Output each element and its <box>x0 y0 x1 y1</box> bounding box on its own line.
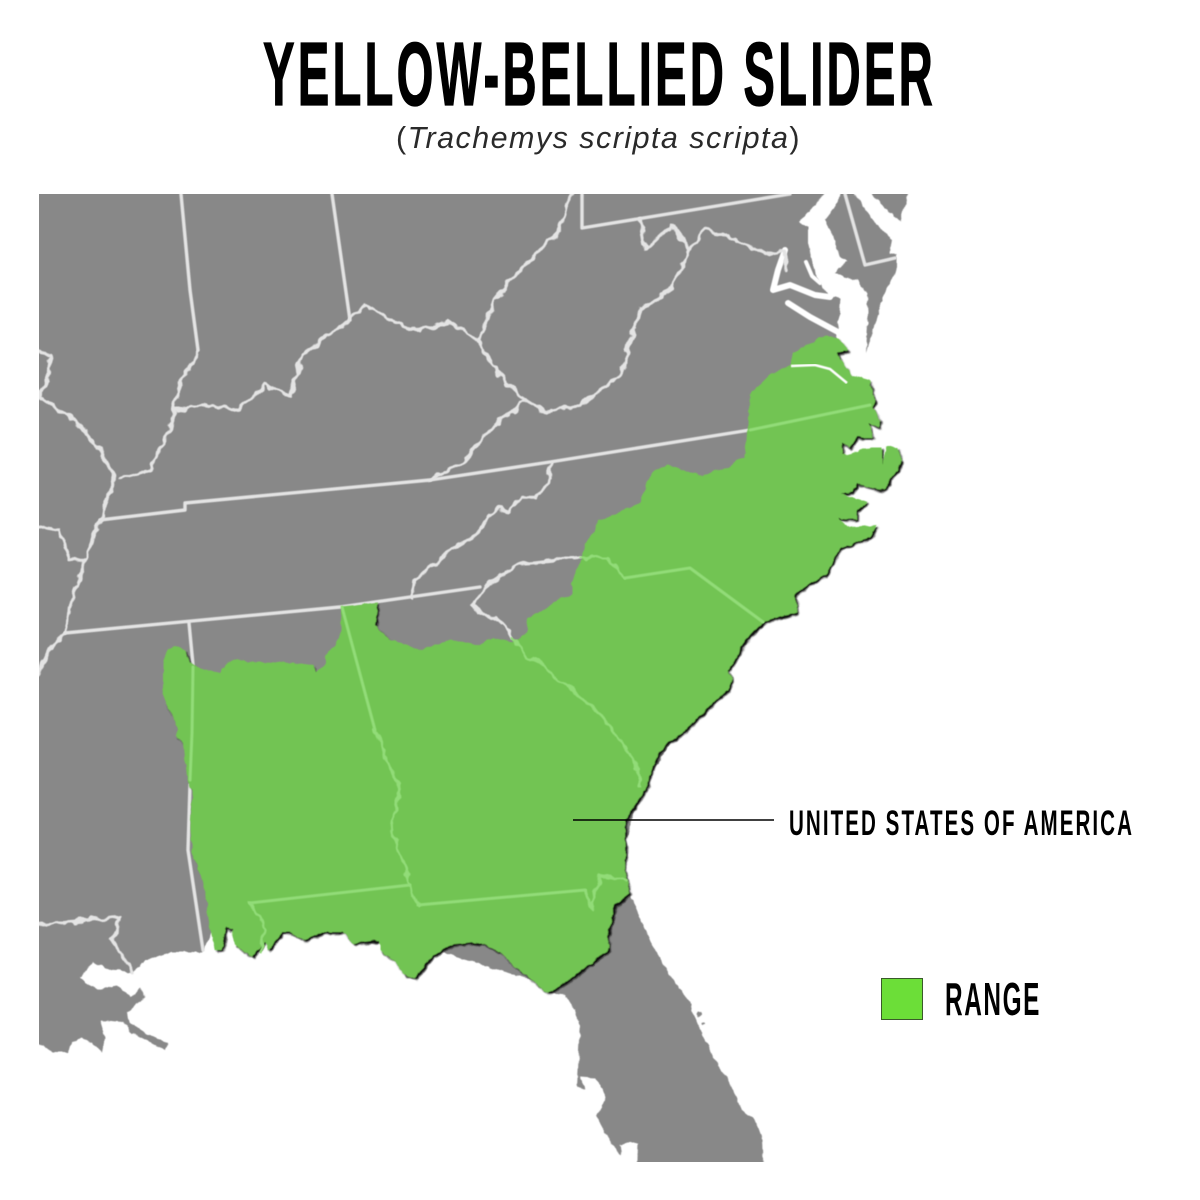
legend swatch <box>882 978 922 1020</box>
winding state borders on land <box>35 190 785 972</box>
Virginia sound: white inlet <box>791 365 847 383</box>
subtitle: scientific name: (Trachemys scripta scripta) <box>396 120 801 155</box>
map: southeastern United States <box>25 180 912 1175</box>
winding state borders within range <box>250 558 640 950</box>
range fill <box>163 336 902 993</box>
leader line <box>573 819 774 821</box>
rivers and bays <box>773 250 838 332</box>
legend label: RANGE <box>945 973 1041 1025</box>
straight state borders on land <box>65 194 895 950</box>
legend: range <box>882 973 1041 1025</box>
land mass <box>25 180 912 1175</box>
straight state borders within range <box>190 405 870 905</box>
range shadow <box>165 338 904 995</box>
range area with drop shadow <box>163 336 904 995</box>
